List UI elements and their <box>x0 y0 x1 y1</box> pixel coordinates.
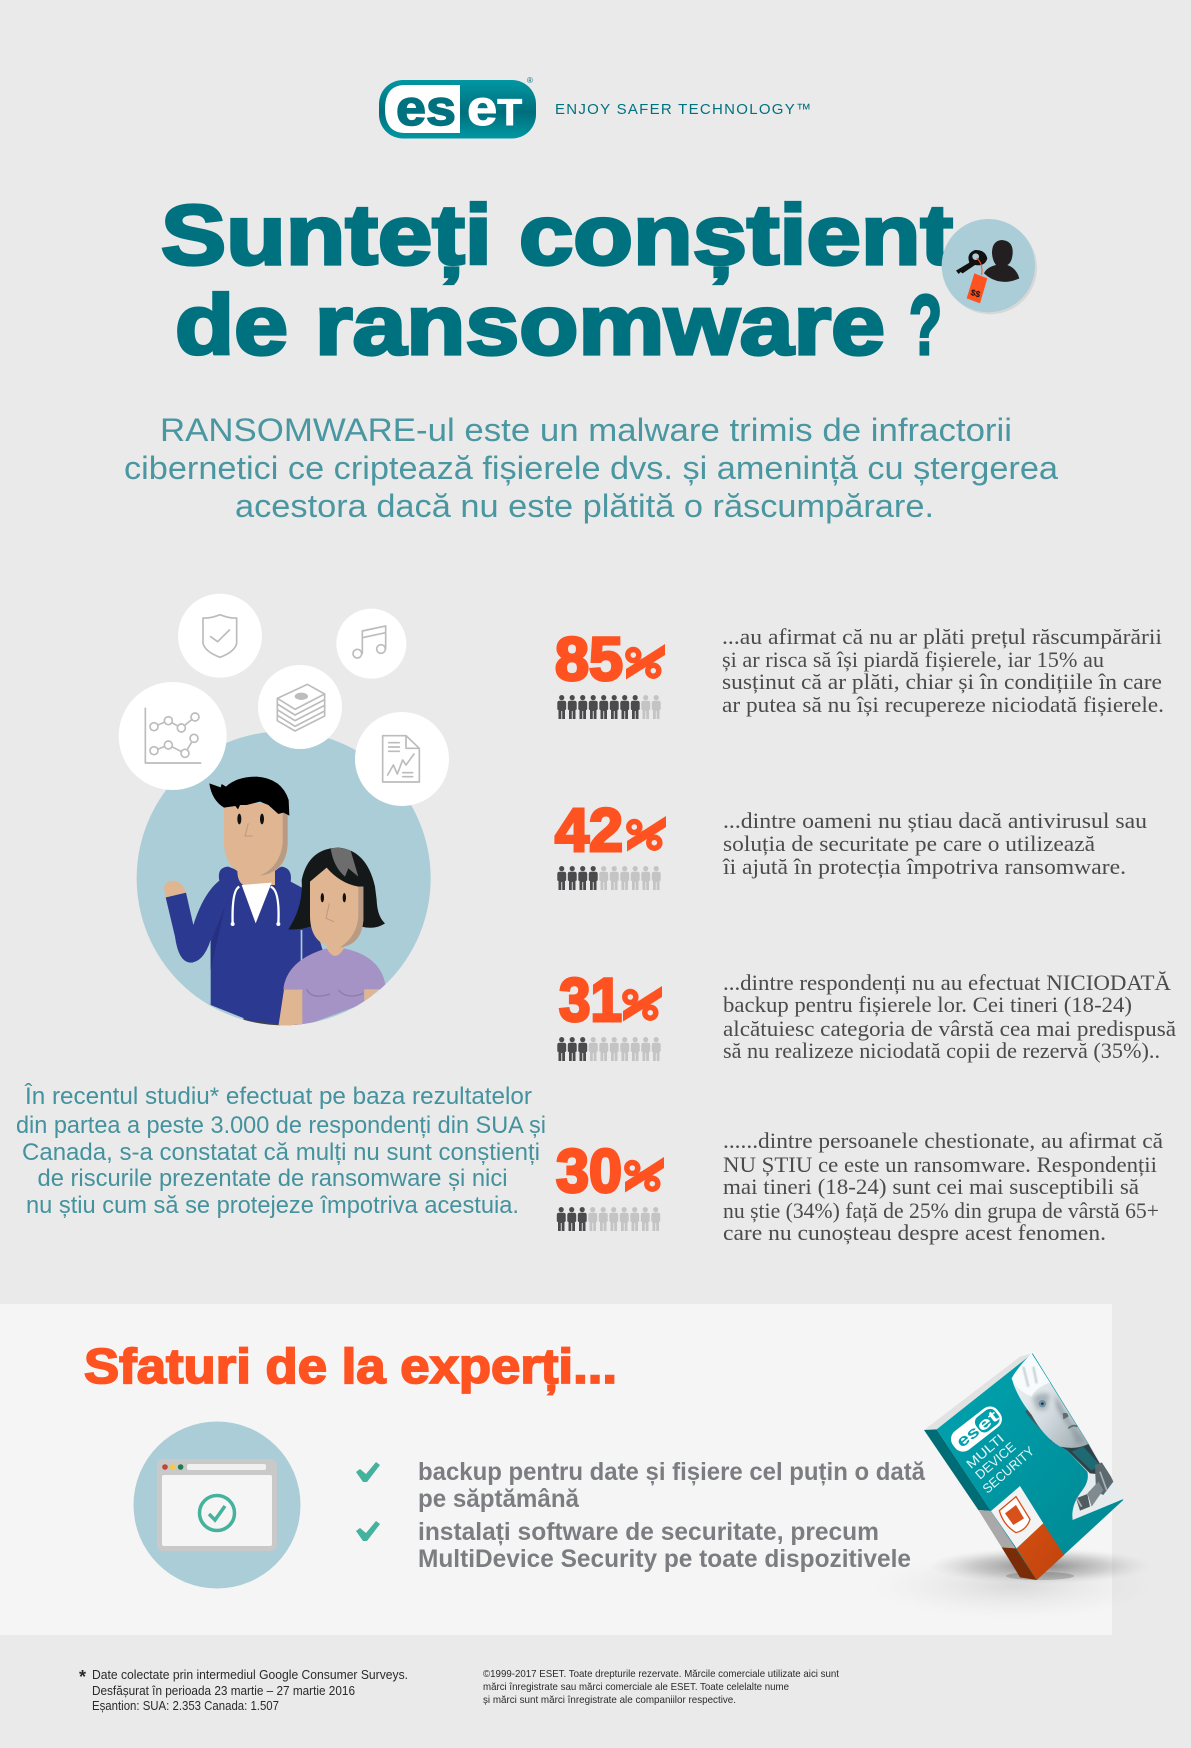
footnote: survey data: Desfășurat în perioada 23 martie – 27 martie 2016 <box>92 1683 355 1698</box>
study paragraph: nu știu cum să se protejeze împotriva acestuia. <box>26 1192 519 1219</box>
stat: 42%: 42 <box>555 796 623 864</box>
stat: 31% <box>557 966 1176 1063</box>
pictogram 31 <box>557 1037 661 1061</box>
text 30 <box>723 1128 1163 1245</box>
pictogram 42 <box>557 866 661 890</box>
logo: ESET: ® <box>527 76 533 85</box>
tip 1: pe săptămână <box>418 1485 580 1513</box>
product box: Multi Device Security <box>924 1353 1125 1580</box>
footnote: survey data <box>79 1667 408 1713</box>
stat: 31%: 31 <box>559 966 622 1034</box>
pictogram 85 <box>557 695 661 719</box>
footnote: copyright: ©1999-2017 ESET. Toate drepturile rezervate. Mărcile comerciale utilizate aici sunt <box>483 1668 839 1680</box>
study paragraph: de riscurile prezentate de ransomware și nici <box>38 1165 508 1192</box>
study paragraph: În recentul studiu* efectuat pe baza rezultatelor <box>24 1083 532 1110</box>
text 42 <box>722 808 1147 879</box>
icon: music <box>336 609 406 679</box>
stat: 85%: % <box>640 657 650 669</box>
text 85: ...au afirmat că nu ar plăti prețul răscumpărării <box>722 624 1162 649</box>
icon: money <box>258 665 342 749</box>
tip 2: MultiDevice Security pe toate dispozitivele <box>418 1545 911 1573</box>
text 30: ......dintre persoanele chestionate, au afirmat că <box>723 1128 1163 1153</box>
text 31 <box>723 970 1176 1063</box>
logo: ESET: es <box>396 80 456 136</box>
study paragraph: Canada, s-a constatat că mulți nu sunt conștienți <box>22 1139 540 1166</box>
illustration: people and data icons <box>119 594 449 1028</box>
text 85: susținut că ar plăti, chiar și în condițiile în care <box>722 669 1162 694</box>
product shadow <box>873 1548 1157 1619</box>
stat: 42%: % <box>641 829 651 841</box>
box title: MULTI <box>963 1431 1007 1472</box>
tagline: ENJOY SAFER TECHNOLOGY™ <box>555 101 811 118</box>
man <box>164 777 323 1028</box>
title: ? <box>909 278 942 372</box>
woman <box>278 848 386 1027</box>
tip 2 <box>356 1518 911 1573</box>
intro description: acestora dacă nu este plătită o răscumpărare. <box>235 488 934 524</box>
title: de ransomware <box>175 278 885 372</box>
text 42: soluția de securitate pe care o utilizează <box>723 831 1095 856</box>
box title: DEVICE <box>972 1439 1019 1482</box>
box title <box>963 1431 1037 1496</box>
footnote: copyright <box>483 1668 839 1706</box>
stat: 30% <box>556 1128 1163 1245</box>
footnote: survey data: Eșantion: SUA: 2.353 Canada: 1.507 <box>92 1698 279 1713</box>
stat: 30%: 30 <box>556 1137 622 1205</box>
text 30: NU ȘTIU ce este un ransomware. Respondenții <box>723 1152 1157 1177</box>
study paragraph: din partea a peste 3.000 de respondenți din SUA și <box>16 1112 546 1139</box>
text 31: alcătuiesc categoria de vârstă cea mai predispusă <box>723 1016 1176 1041</box>
icon: shield <box>178 594 262 678</box>
title: Sunteți conștient <box>161 188 953 283</box>
text 42: ...dintre oameni nu știau dacă antivirusul sau <box>723 808 1147 833</box>
logo: ESET <box>379 76 536 138</box>
box logo: et <box>973 1406 1003 1436</box>
stat: 85% <box>555 624 1164 719</box>
footnote: survey data: Date colectate prin intermediul Google Consumer Surveys. <box>92 1667 408 1682</box>
icon: document <box>355 712 449 806</box>
icon: line chart <box>119 682 227 790</box>
text 42: îi ajută în protecția împotriva ransomware. <box>722 854 1126 879</box>
footnote: copyright: și mărci sunt mărci înregistrate ale companiilor respective. <box>483 1694 736 1706</box>
title <box>161 188 953 372</box>
logo: ESET: eT <box>467 80 522 136</box>
footnote: copyright: mărci înregistrate sau mărci comerciale ale ESET. Toate celelalte nume <box>483 1681 789 1693</box>
stat: 42% <box>555 796 1147 890</box>
icon: ransom badge: $$ <box>969 287 982 300</box>
text 31: backup pentru fișierele lor. Cei tineri (18-24) <box>723 992 1132 1017</box>
tip 2: instalați software de securitate, precum <box>418 1518 879 1546</box>
stat: 31%: % <box>637 999 647 1011</box>
text 30: nu știe (34%) față de 25% din grupa de vârstă 65+ <box>723 1198 1159 1223</box>
box logo <box>947 1402 1006 1456</box>
tip 1 <box>356 1458 926 1513</box>
study paragraph <box>16 1083 546 1219</box>
tip 1: backup pentru date și fișiere cel puțin o dată <box>418 1458 926 1486</box>
heading: tips: Sfaturi de la experți... <box>84 1340 617 1394</box>
text 31: să nu realizeze niciodată copii de rezervă (35%).. <box>723 1038 1160 1063</box>
box title: SECURITY <box>979 1443 1037 1496</box>
intro description: RANSOMWARE-ul este un malware trimis de infractorii <box>160 412 1012 448</box>
text 85: și ar risca să își piardă fișierele, iar 15% au <box>722 647 1104 672</box>
icon: browser check <box>134 1422 300 1588</box>
text 30: care nu cunoșteau despre acest fenomen. <box>723 1220 1106 1245</box>
stat: 85%: 85 <box>555 625 623 693</box>
icon: ransom badge <box>942 219 1037 314</box>
footnote: survey data: * <box>79 1667 86 1687</box>
text 30: mai tineri (18-24) sunt cei mai susceptibili să <box>723 1174 1139 1199</box>
box artwork: robot <box>1012 1353 1125 1520</box>
intro description: cibernetici ce criptează fișierele dvs. și amenință cu ștergerea <box>124 450 1058 486</box>
intro description <box>124 412 1058 524</box>
pictogram 30 <box>557 1207 660 1231</box>
panel: expert tips <box>0 1304 1112 1635</box>
text 85: ar putea să nu își recupereze niciodată fișierele. <box>722 692 1164 717</box>
stat: 30%: % <box>639 1170 649 1182</box>
box logo: es <box>953 1422 983 1451</box>
text 85 <box>722 624 1164 717</box>
text 31: ...dintre respondenți nu au efectuat NICIODATĂ <box>723 970 1171 995</box>
